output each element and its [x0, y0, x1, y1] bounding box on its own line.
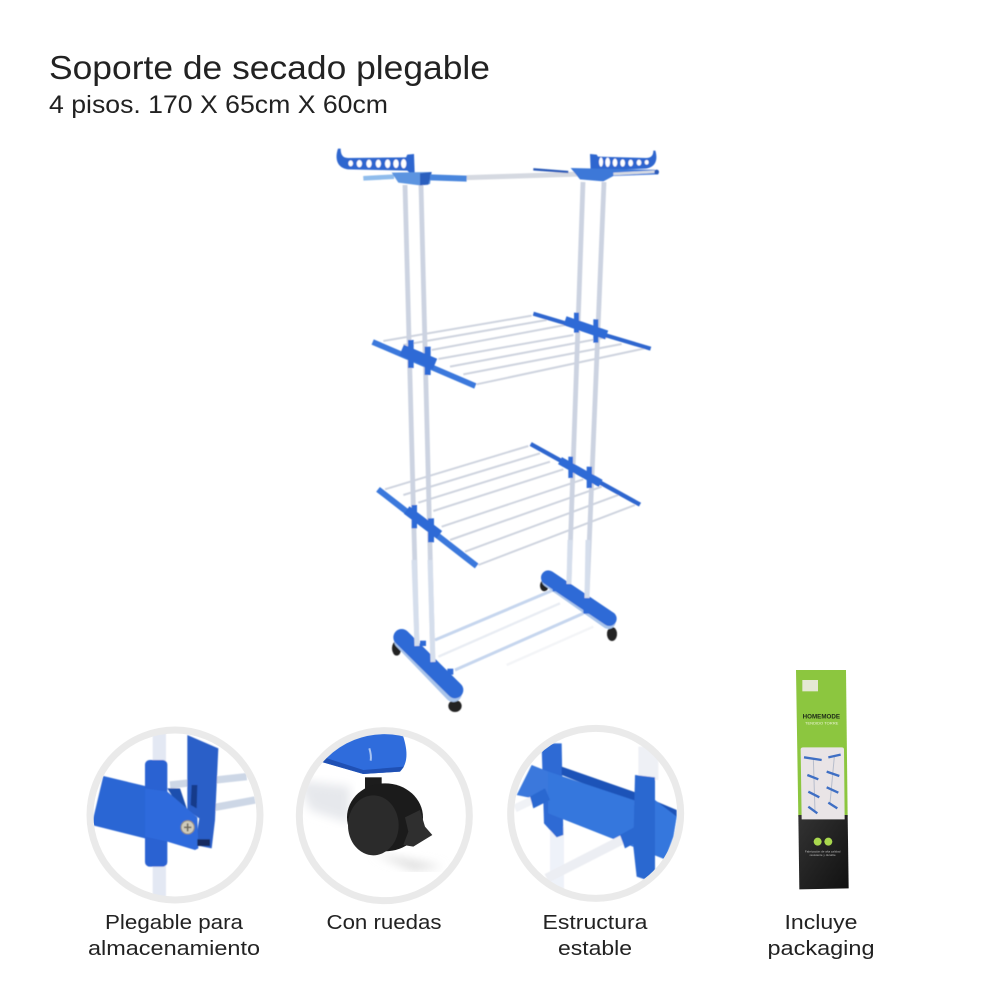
right foot — [549, 580, 608, 622]
connectors — [530, 788, 550, 808]
caption: packaging — [768, 912, 874, 960]
foot connectors — [420, 641, 426, 646]
ring — [299, 731, 469, 901]
right hook bracket — [590, 151, 656, 171]
caption: wheels: Con ruedas — [326, 912, 442, 934]
caption: packaging: Incluye — [784, 912, 858, 934]
green dots — [814, 838, 822, 846]
main product: drying rack — [337, 149, 659, 712]
uprights — [405, 182, 604, 668]
base rails — [435, 590, 593, 670]
base feet and wheels — [392, 578, 617, 712]
slot — [197, 839, 210, 846]
caption: stable structure — [542, 912, 648, 960]
uprights in front of base — [414, 540, 588, 662]
wheels — [392, 580, 617, 712]
caption: stable structure: estable — [558, 938, 632, 960]
packaging box: TENDIDO TORRE — [805, 722, 839, 726]
left foot — [403, 641, 453, 693]
product photo panel — [801, 747, 845, 819]
caption: folding — [88, 912, 260, 960]
arm of shelf — [92, 776, 145, 838]
brand: HOMEMODE — [803, 714, 840, 720]
stem — [365, 777, 382, 788]
plate — [548, 772, 677, 859]
right sleeve — [633, 775, 655, 880]
caption: folding: almacenamiento — [88, 938, 260, 960]
caption: stable structure: Estructura — [542, 912, 648, 934]
ring — [511, 728, 681, 898]
green front — [796, 670, 848, 817]
white pole — [153, 730, 166, 897]
lower shelf bars — [378, 444, 640, 566]
caption: packaging: packaging — [768, 938, 874, 960]
floor shadow — [304, 780, 352, 822]
screw — [181, 821, 194, 834]
rails of lower shelf — [385, 446, 635, 565]
inner wall — [562, 767, 677, 817]
sleeve — [145, 760, 167, 867]
box small print: Fabricación de alta calidad — [805, 850, 841, 854]
folding arm — [187, 735, 218, 848]
box small print: resistente y durable — [810, 853, 836, 857]
ring — [90, 730, 260, 900]
rails — [515, 800, 533, 808]
detail circle: folding hinge — [90, 730, 260, 900]
rails of upper shelf — [383, 316, 645, 384]
upper shelf bars — [373, 313, 651, 386]
box small print — [805, 850, 841, 857]
top hanging brackets and top bar — [337, 149, 659, 185]
foot — [321, 732, 406, 774]
rails behind hinge — [170, 777, 255, 807]
caption: folding: Plegable para — [105, 912, 244, 934]
poles — [550, 827, 564, 893]
detail circle: stable structure — [511, 728, 681, 898]
subtitle: dimensions: 4 pisos. 170 X 65cm X 60cm — [49, 91, 388, 119]
hinge plate — [145, 788, 198, 850]
title: Soporte de secado plegable — [49, 49, 490, 86]
left hook bracket — [337, 149, 415, 173]
left wing — [517, 765, 548, 802]
detail circle: caster wheel — [297, 731, 469, 901]
left sleeve — [542, 743, 563, 837]
black lower panel — [798, 815, 849, 889]
brake — [403, 810, 432, 847]
packaging box — [796, 670, 849, 889]
top bar — [467, 172, 655, 178]
logo tag — [802, 680, 818, 691]
wheel — [347, 783, 423, 851]
miniature rack — [804, 755, 841, 813]
